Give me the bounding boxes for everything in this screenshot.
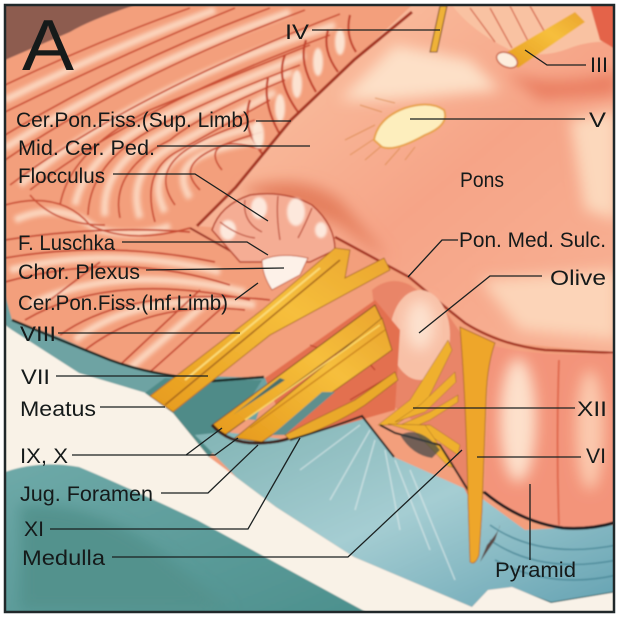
nerve XII bbox=[378, 340, 460, 468]
leader lines bbox=[50, 30, 586, 560]
panel letter A: A bbox=[22, 6, 74, 86]
labels: XI bbox=[24, 518, 44, 541]
medulla pyramids bbox=[484, 345, 617, 528]
labels: Jug. Foramen bbox=[20, 483, 153, 506]
labels: Pons bbox=[460, 169, 504, 192]
bottom right white corner bbox=[472, 586, 613, 608]
olive and lateral medulla bbox=[372, 281, 470, 500]
light membrane bbox=[195, 417, 617, 607]
top right cerebellum lobe bbox=[454, 6, 602, 54]
lower left teal bbox=[5, 464, 375, 617]
teal gaps between nerves bbox=[233, 378, 285, 415]
labels: Chor. Plexus bbox=[18, 261, 140, 284]
nerve V bbox=[345, 98, 445, 165]
lower cerebellar edge bbox=[12, 320, 264, 381]
nerve III bbox=[502, 12, 585, 68]
labels: Mid. Cer. Ped. bbox=[18, 137, 155, 160]
labels: Flocculus bbox=[18, 165, 105, 188]
white bone band bbox=[6, 325, 473, 611]
cerebellum highlights bbox=[5, 10, 335, 368]
labels: V bbox=[589, 109, 606, 132]
labels: VI bbox=[586, 445, 606, 468]
labels: Pyramid bbox=[495, 559, 576, 582]
nerve rootlets tissue bbox=[265, 300, 400, 440]
dark corner bbox=[5, 5, 135, 60]
nerve IV bbox=[430, 6, 447, 52]
labels: VII bbox=[21, 366, 50, 389]
upper cerebellar folia bbox=[5, 8, 340, 236]
bottom striping bbox=[490, 525, 617, 580]
upper teal strip bbox=[5, 295, 270, 420]
labels: IV bbox=[285, 21, 309, 44]
labels: Pon. Med. Sulc. bbox=[459, 229, 606, 252]
labels: III bbox=[590, 54, 608, 77]
pons bbox=[197, 5, 617, 353]
labels: XII bbox=[577, 398, 607, 421]
labels: IX, X bbox=[20, 445, 68, 468]
choroid plexus bbox=[262, 255, 308, 290]
labels: Cer.Pon.Fiss.(Inf.Limb) bbox=[18, 292, 228, 315]
gyral ridges near sulcus bbox=[247, 15, 356, 158]
labels: Cer.Pon.Fiss.(Sup. Limb) bbox=[16, 109, 250, 132]
flocculus bbox=[212, 194, 335, 262]
labels: Meatus bbox=[20, 398, 96, 421]
lower cerebellum folia bbox=[5, 230, 270, 372]
nerves VII and VIII bbox=[150, 248, 390, 412]
nerve XI bbox=[285, 372, 398, 440]
pons sulcus bbox=[197, 12, 412, 226]
labels: Medulla bbox=[22, 547, 105, 570]
nerve VI bbox=[460, 327, 500, 563]
labels: VIII bbox=[20, 323, 56, 346]
nerves IX X bbox=[212, 305, 392, 443]
labels: Olive bbox=[550, 267, 606, 290]
labels: F. Luschka bbox=[18, 232, 115, 255]
